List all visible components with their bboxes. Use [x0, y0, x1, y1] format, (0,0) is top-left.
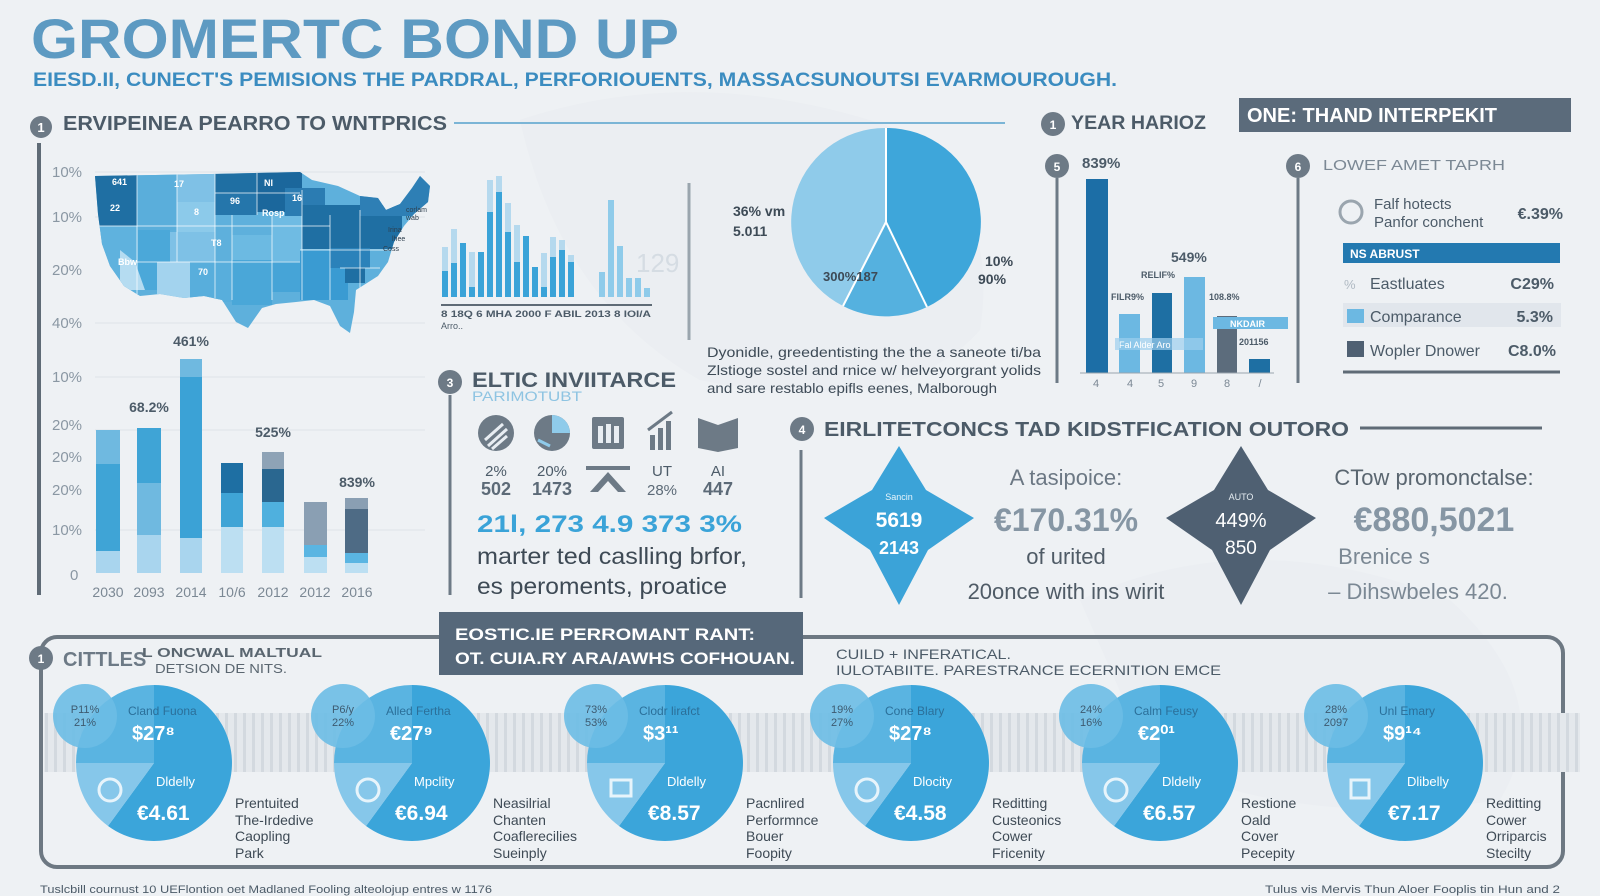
circle card 4: Dlocity — [913, 774, 953, 789]
map: US states — [95, 172, 430, 333]
section 3 header: PARIMOTUBT — [472, 388, 583, 404]
circle card 3: Performnce — [746, 812, 819, 828]
map: US states: wab — [405, 215, 419, 222]
mini bar chart: 129 — [636, 248, 679, 278]
icon: globe — [534, 415, 570, 451]
circle card 2: €27⁹ — [390, 723, 433, 745]
circle card 1: Park — [235, 845, 265, 861]
panel 5: bar chart: 9 — [1191, 378, 1197, 390]
circle card 2 — [311, 684, 577, 861]
circle card 2: Neasilrial — [493, 795, 551, 811]
bottom section header: L ONCWAL MALTUAL — [142, 645, 322, 660]
icon: grid box — [592, 417, 624, 449]
pie description text: and sare restablo epifls eenes, Malborough — [707, 380, 997, 396]
circle card 5: Cover — [1241, 828, 1279, 844]
panel 5: bar chart: 5 — [1158, 378, 1164, 390]
panel 5: bar chart: 8 — [1224, 378, 1230, 390]
y axis labels: 20% — [52, 262, 82, 279]
circle card 4: $27⁸ — [889, 723, 932, 745]
circle card 2: Chanten — [493, 812, 546, 828]
circle card 6: Stecilty — [1486, 845, 1531, 861]
bottom panel frame — [41, 637, 1580, 867]
panel 6: legend: Comparance — [1370, 309, 1462, 326]
map: US states: 17 — [174, 179, 184, 189]
circle card 4: Custeonics — [992, 812, 1061, 828]
y axis labels: 20% — [52, 482, 82, 499]
panel 5: bar chart: FILR9% — [1111, 292, 1144, 302]
panel 5: bar chart: RELIF% — [1141, 270, 1175, 280]
circle card 2: Coaflerecilies — [493, 828, 577, 844]
text block B: – Dihswbeles 420. — [1328, 579, 1508, 604]
icon: book — [698, 418, 738, 452]
text block A: 20once with ins wirit — [968, 579, 1164, 604]
footer notes: Tulus vis Mervis Thun Aloer Fooplis tin Hun and 2 — [1265, 884, 1560, 896]
y axis labels: 10% — [52, 209, 82, 226]
stacked bar chart: 2012 — [299, 584, 331, 600]
pie chart: 36% vm — [733, 203, 785, 219]
star: blue — [824, 446, 974, 605]
map: US states: corlam — [406, 207, 427, 214]
circle card 6: Orriparcis — [1486, 828, 1547, 844]
text block A — [968, 465, 1164, 604]
star: dark — [1166, 446, 1316, 605]
circle card 2: P6/y — [332, 704, 355, 716]
section: year header: YEAR HARIOZ — [1071, 113, 1206, 134]
circle card 5: 16% — [1080, 717, 1102, 729]
circle card 1 — [53, 684, 314, 861]
panel 5: bar chart: 4 — [1093, 378, 1099, 390]
title: GROMERTC BOND UP — [31, 7, 679, 70]
pie chart: 90% — [978, 271, 1007, 287]
section 1 header — [30, 113, 1005, 138]
bottom sub-header — [836, 646, 1221, 678]
dark callout box: OT. CUIA.RY ARA/AWHS COFHOUAN. — [455, 649, 795, 668]
panel 6: legend: 6 — [1295, 160, 1302, 174]
y axis labels: 10% — [52, 369, 82, 386]
icon stats: 447 — [703, 479, 733, 499]
panel 5: bar chart: 549% — [1171, 249, 1207, 265]
circle card 6: $9¹⁴ — [1383, 723, 1422, 745]
circle card 3: Bouer — [746, 828, 784, 844]
text block B: CTow promonctalse: — [1334, 465, 1534, 490]
mini bar chart — [441, 176, 679, 331]
y axis labels: 0 — [70, 567, 78, 584]
circle card 4: Cower — [992, 828, 1033, 844]
icon stats: 1473 — [532, 479, 572, 499]
pie chart: 5.011 — [733, 223, 767, 239]
panel 6: legend: C8.0% — [1508, 343, 1556, 360]
map: US states: lhee — [392, 236, 405, 243]
stacked bar chart: 10/6 — [218, 584, 246, 600]
circle card 6: Unl Emary — [1379, 704, 1435, 718]
star: dark: 850 — [1225, 538, 1257, 559]
icon stats: AI — [711, 463, 725, 480]
section 3 text: es peroments, proatice — [477, 573, 727, 599]
section: year header — [1041, 112, 1206, 136]
y axis labels: 20% — [52, 417, 82, 434]
bottom section header: 1 — [38, 652, 45, 666]
panel 5: bar chart: / — [1258, 378, 1262, 390]
circle card 2: €6.94 — [395, 802, 448, 825]
map: US states: Coss — [383, 246, 399, 253]
circle card 5 — [1059, 684, 1296, 861]
map: US states: Bbw — [118, 257, 138, 267]
panel 5: bar chart: 201156 — [1239, 337, 1269, 347]
map: US states: Rosp — [262, 208, 285, 218]
map: US states: 641 — [112, 177, 127, 187]
panel 6: legend: % — [1344, 277, 1356, 292]
dark banner: ONE: THAND INTERPEKIT — [1247, 105, 1497, 127]
circle card 4: Cone Blary — [885, 704, 944, 718]
icon stats: 502 — [481, 479, 511, 499]
pie description text: Zlstioge sostel and rnice w/ helveyorgrant yolids — [707, 362, 1041, 378]
circle card 5: €2⁰¹ — [1138, 723, 1175, 745]
circle card 6 — [1304, 684, 1547, 861]
pie chart: 300%187 — [823, 269, 878, 284]
section 4 header — [790, 417, 1542, 441]
circle card 5: Calm Feusy — [1134, 704, 1198, 718]
stacked bar chart: 2093 — [133, 584, 165, 600]
bottom section header: CITTLES — [63, 649, 146, 671]
section 1 header: 1 — [37, 120, 45, 135]
section: year header: 1 — [1050, 118, 1057, 132]
footer notes — [40, 884, 1560, 896]
circle card 3 — [564, 684, 819, 861]
dark callout box: EOSTIC.IE PERROMANT RANT: — [455, 625, 755, 644]
bottom sub-header: IULOTABIITE. PARESTRANCE ECERNITION EMCE — [836, 662, 1221, 678]
circle card 1: $27⁸ — [132, 723, 175, 745]
section 3 text: marter ted caslling brfor, — [477, 543, 747, 569]
section 4 header: 4 — [799, 423, 806, 437]
circle card 2: Mpclity — [414, 774, 455, 789]
bottom section header: DETSION DE NITS. — [155, 661, 287, 676]
section 4 header: EIRLITETCONCS TAD KIDSTFICATION OUTORO — [824, 419, 1349, 441]
section 1 header: ERVIPEINEA PEARRO TO WNTPRICS — [63, 113, 447, 135]
circle card 3: 53% — [585, 717, 607, 729]
map: US states: NI — [264, 178, 273, 188]
circle card 2: Alled Fertha — [386, 704, 451, 718]
bottom sub-header: CUILD + INFERATICAL. — [836, 646, 1011, 662]
circle card 3: $3¹¹ — [643, 723, 679, 745]
y axis labels: 10% — [52, 522, 82, 539]
panel 6: legend: Wopler Dnower — [1370, 343, 1481, 360]
pie chart — [733, 128, 1014, 316]
circle card 6: Reditting — [1486, 795, 1541, 811]
panel 6: legend: LOWEF AMET TAPRH — [1323, 157, 1505, 174]
stacked bar chart: 461% — [173, 333, 209, 349]
panel 6: legend: €.39% — [1518, 206, 1563, 223]
text block A: A tasipoice: — [1010, 465, 1122, 490]
circle card 3: €8.57 — [648, 802, 701, 825]
circle card 5: Pecepity — [1241, 845, 1295, 861]
map: US states: 96 — [230, 196, 240, 206]
stacked bar chart: 2012 — [257, 584, 289, 600]
map: US states: 8 — [194, 207, 199, 217]
map: US states: T8 — [211, 238, 222, 248]
stacked bar chart: 2016 — [341, 584, 373, 600]
stacked bar chart: 2030 — [92, 584, 124, 600]
circle card 6: Dlibelly — [1407, 774, 1449, 789]
y axis labels: 20% — [52, 449, 82, 466]
circle card 1: €4.61 — [137, 802, 190, 825]
star: dark: 449% — [1215, 510, 1267, 532]
subtitle: EIESD.II, CUNECT'S PEMISIONS THE PARDRAL, PERFORIOUENTS, MASSACSUNOUTSI EVARMOUROUGH. — [33, 70, 1117, 91]
section 3 header: ELTIC INVIITARCE — [472, 369, 676, 392]
circle card 4: €4.58 — [894, 802, 947, 825]
circle card 5: 24% — [1080, 704, 1102, 716]
pie description text — [707, 344, 1041, 396]
bottom section header — [29, 645, 322, 676]
icon stats: 2% — [485, 463, 507, 480]
circle card 1: P11% — [71, 704, 99, 716]
panel 5: bar chart: Fal Alder Aro — [1119, 340, 1171, 350]
circle card 4: Fricenity — [992, 845, 1045, 861]
section 3 text — [477, 543, 747, 599]
circle card 1: The-Irdedive — [235, 812, 314, 828]
panel 6: legend: C29% — [1510, 276, 1554, 293]
dark banner — [1239, 98, 1571, 132]
stacked bar chart — [92, 333, 375, 600]
stacked bar chart: 839% — [339, 474, 375, 490]
mini bar chart: Arro.. — [441, 321, 463, 331]
circle card 6: 28% — [1325, 704, 1347, 716]
circle card 6: €7.17 — [1388, 802, 1441, 825]
circle card 6: 2097 — [1324, 717, 1348, 729]
star: dark: AUTO — [1229, 492, 1253, 502]
big blue numbers: 21l, 273 4.9 373 3% — [477, 511, 742, 538]
circle card 1: Caopling — [235, 828, 290, 844]
section 3 header: 3 — [447, 376, 454, 390]
stacked bar chart: 2014 — [175, 584, 207, 600]
circle card 3: 73% — [585, 704, 607, 716]
panel 5: bar chart: 4 — [1127, 378, 1133, 390]
circle card 4: Reditting — [992, 795, 1047, 811]
y axis labels: 40% — [52, 315, 82, 332]
y axis labels: 10% — [52, 164, 82, 181]
panel 6: legend — [1286, 154, 1563, 383]
icon stats: 28% — [647, 482, 677, 499]
circle card 5: €6.57 — [1143, 802, 1196, 825]
section 3 header — [438, 369, 676, 404]
circle card 5: Dldelly — [1162, 774, 1202, 789]
icon stats: 20% — [537, 463, 567, 480]
panel 5: bar chart — [1045, 154, 1288, 390]
panel 6: legend: NS ABRUST — [1350, 247, 1420, 261]
icon: roof — [586, 466, 630, 492]
icon: striped circle — [478, 415, 514, 451]
panel 6: legend: Panfor conchent — [1374, 214, 1484, 231]
panel 5: bar chart: 5 — [1054, 160, 1061, 174]
circle card 4 — [810, 684, 1061, 861]
panel 5: bar chart: 108.8% — [1209, 292, 1240, 302]
circle card 1: 21% — [74, 717, 96, 729]
map: US states: 22 — [110, 203, 120, 213]
circle card 4: 19% — [831, 704, 853, 716]
panel 6: legend: Eastluates — [1370, 276, 1445, 293]
dark callout box — [439, 612, 803, 675]
stacked bar chart: 68.2% — [129, 399, 169, 415]
circle card 6: Cower — [1486, 812, 1527, 828]
icon stats — [481, 463, 733, 499]
circle card 3: Dldelly — [667, 774, 707, 789]
text block B: Brenice s — [1338, 544, 1430, 569]
circle card 1: Cland Fuona — [128, 704, 197, 718]
panel 5: bar chart: NKDAIR — [1230, 319, 1265, 329]
star: blue: Sancin — [885, 492, 913, 502]
text block A: €170.31% — [994, 502, 1138, 538]
circle card 2: Sueinply — [493, 845, 547, 861]
stacked bar chart: 525% — [255, 424, 291, 440]
map: US states: 16 — [292, 193, 302, 203]
icon: bar chart — [648, 412, 672, 450]
circle card 1: Prentuited — [235, 795, 299, 811]
circle card 3: Pacnlired — [746, 795, 804, 811]
map: US states: Irina — [388, 227, 402, 234]
circle card 2: 22% — [332, 717, 354, 729]
circle card 3: Foopity — [746, 845, 792, 861]
mini bar chart: 8 18Q 6 MHA 2000 F ABIL 2013 8 IOI/A — [441, 309, 652, 319]
map: US states: 70 — [198, 267, 208, 277]
panel 6: legend: 5.3% — [1517, 309, 1553, 326]
panel 6: legend: Falf hotects — [1374, 196, 1452, 213]
panel 5: bar chart: 839% — [1082, 155, 1120, 172]
circle card 3: Clodr lirafct — [639, 704, 700, 718]
circle card 4: 27% — [831, 717, 853, 729]
pie chart: 10% — [985, 253, 1014, 269]
icon stats: UT — [652, 463, 672, 480]
icons row — [478, 412, 738, 492]
pie description text: Dyonidle, greedentisting the the a saneote ti/ba — [707, 344, 1041, 360]
text block A: of urited — [1026, 544, 1106, 569]
footer notes: Tuslcbill cournust 10 UEFlontion oet Madlaned Fooling alteolojup entres w 1176 — [40, 884, 492, 896]
circle card 5: Restione — [1241, 795, 1296, 811]
text block B: €880,5021 — [1354, 501, 1514, 539]
star: blue: 5619 — [876, 509, 922, 532]
star: blue: 2143 — [879, 538, 919, 558]
y axis labels — [52, 164, 82, 584]
circle card 5: Oald — [1241, 812, 1271, 828]
circle card 1: Dldelly — [156, 774, 196, 789]
text block B — [1328, 465, 1534, 604]
